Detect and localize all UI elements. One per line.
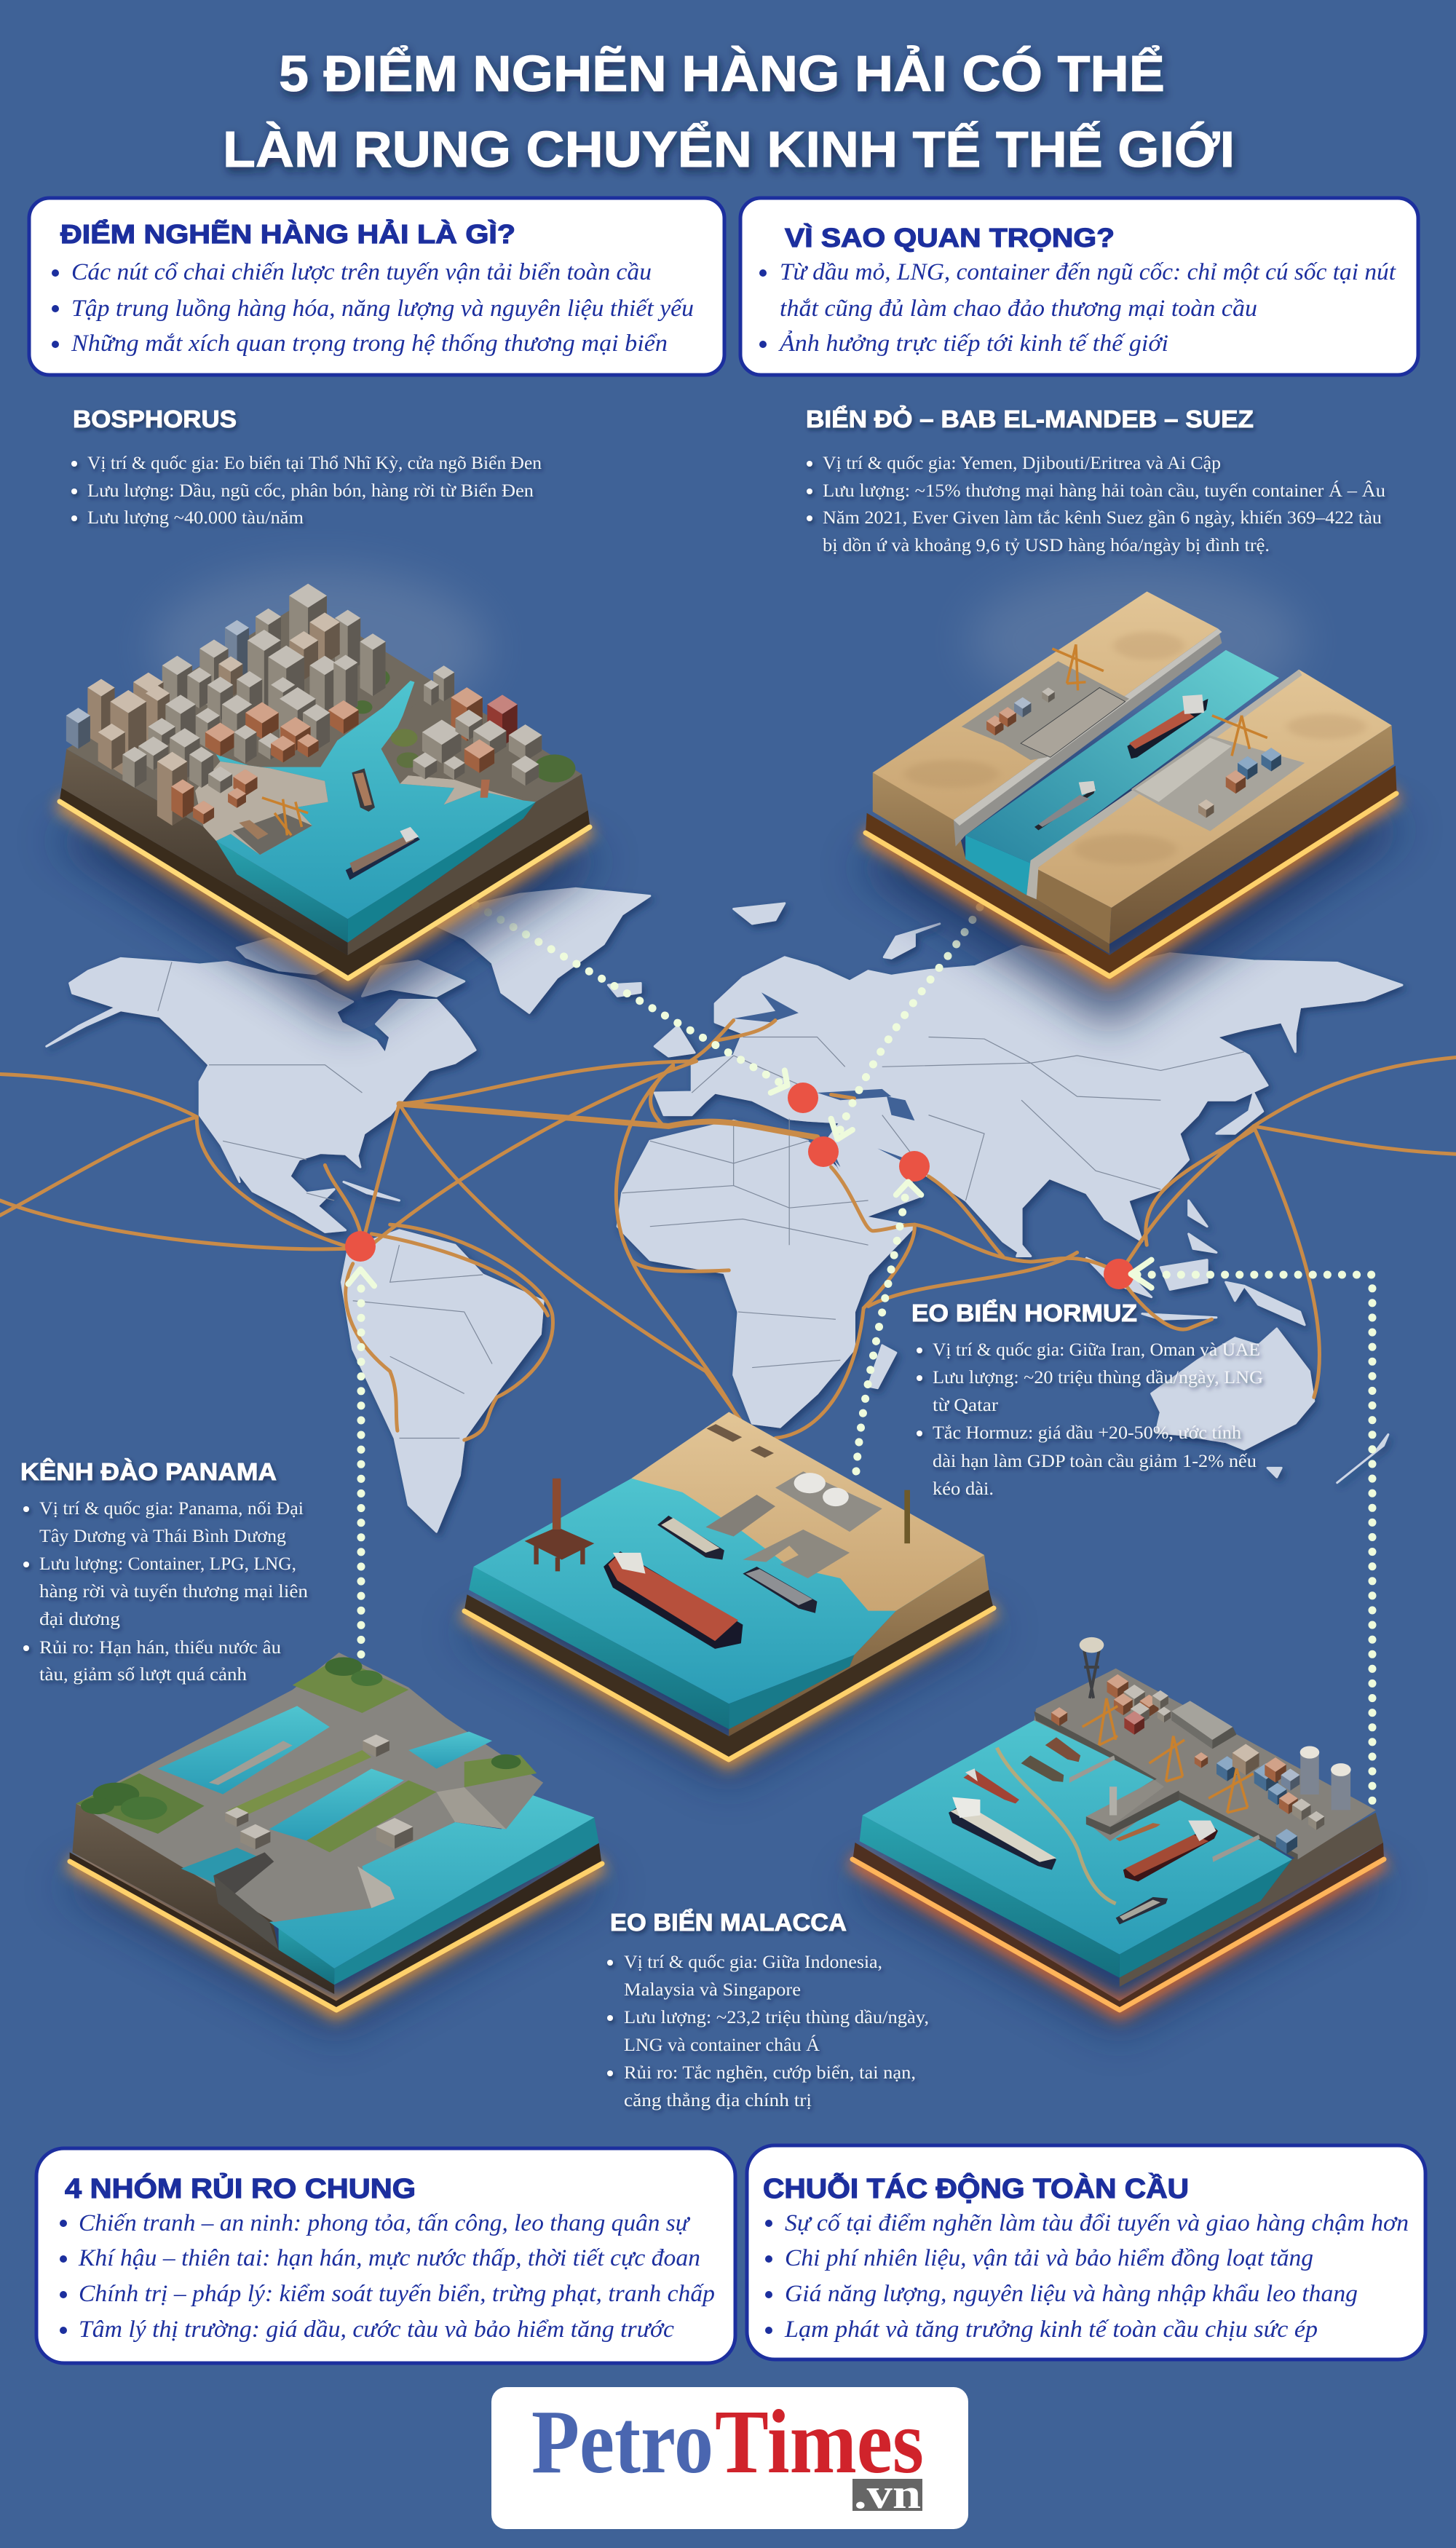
arrowheads: [348, 1070, 1152, 1288]
text block: Hormuz: kéo dài.: [933, 1479, 994, 1499]
logo: Times: [715, 2392, 924, 2493]
bullet list: Tập trung luồng hàng hóa, năng lượng và nguyên liệu thiết yếu: [71, 296, 694, 322]
shipping routes: [0, 1021, 1456, 1440]
text block: Hormuz: Lưu lượng: ~20 triệu thùng dầu/ngày, LNG: [933, 1368, 1263, 1388]
text block: Malacca: [607, 1909, 929, 2110]
bullet list: [765, 2210, 1409, 2343]
bullet list: Lạm phát và tăng trưởng kinh tế toàn cầu chịu sức ép: [784, 2316, 1318, 2343]
bullet list: Chính trị – pháp lý: kiểm soát tuyến biển, trừng phạt, tranh chấp: [79, 2281, 715, 2307]
platform shadows and halos: [51, 568, 1409, 2035]
text block: Hormuz: dài hạn làm GDP toàn cầu giảm 1-2% nếu: [933, 1452, 1257, 1471]
text block: Red Sea Suez: Năm 2021, Ever Given làm tắc kênh Suez gần 6 ngày, khiến 369–422 tàu: [823, 508, 1382, 528]
icon: Hormuz diorama: [464, 1412, 994, 1760]
text block: Red Sea Suez: BIỂN ĐỎ – BAB EL-MANDEB – SUEZ: [806, 405, 1254, 432]
text block: Bosphorus: Vị trí & quốc gia: Eo biển tại Thổ Nhĩ Kỳ, cửa ngõ Biển Đen: [87, 454, 542, 473]
heading: CHUỖI TÁC ĐỘNG TOÀN CẦU: [763, 2172, 1189, 2204]
text block: Red Sea Suez: Vị trí & quốc gia: Yemen, Djibouti/Eritrea và Ai Cập: [823, 454, 1221, 473]
text block: Panama: đại dương: [39, 1610, 121, 1629]
text block: Panama: [20, 1458, 309, 1685]
text block: Hormuz: [911, 1299, 1263, 1499]
panel: why it matters: [740, 198, 1418, 375]
text block: Panama: tàu, giảm số lượt quá cảnh: [39, 1665, 248, 1685]
text block: Hormuz: Vị trí & quốc gia: Giữa Iran, Oman và UAE: [933, 1340, 1260, 1360]
text block: Malacca: EO BIỂN MALACCA: [610, 1909, 847, 1936]
text block: Bosphorus: [71, 405, 542, 528]
bullet list: [60, 2210, 715, 2343]
text block: Hormuz: Tắc Hormuz: giá dầu +20-50%, ước tính: [933, 1423, 1242, 1443]
text block: Bosphorus: Lưu lượng ~40.000 tàu/năm: [87, 508, 304, 528]
text block: Bosphorus: BOSPHORUS: [73, 405, 237, 432]
title: LÀM RUNG CHUYỂN KINH TẾ THẾ GIỚI: [223, 120, 1235, 178]
logo: .vn: [854, 2470, 921, 2517]
text block: Red Sea Suez: [806, 405, 1386, 555]
panel: global impact chain: [747, 2145, 1425, 2359]
world map: [47, 888, 1402, 1532]
bullet list: Những mắt xích quan trọng trong hệ thống thương mại biển: [71, 331, 668, 357]
text block: Panama: hàng rời và tuyến thương mại liên: [39, 1582, 309, 1602]
title: [223, 44, 1235, 178]
text block: Red Sea Suez: bị dồn ứ và khoảng 9,6 tỷ USD hàng hóa/ngày bị đình trệ.: [823, 536, 1270, 555]
bullet list: Chiến tranh – an ninh: phong tỏa, tấn công, leo thang quân sự: [79, 2210, 691, 2236]
icon: Malacca diorama: [852, 1637, 1384, 2010]
panel: four risk groups: [36, 2148, 735, 2363]
bullet list: [759, 259, 1396, 357]
bullet list: Sự cố tại điểm nghẽn làm tàu đổi tuyến và giao hàng chậm hơn: [785, 2210, 1409, 2236]
icon: Suez canal diorama: [866, 592, 1397, 976]
text block: Malacca: Malaysia và Singapore: [624, 1980, 801, 2000]
text block: Malacca: Rủi ro: Tắc nghẽn, cướp biển, tai nạn,: [624, 2063, 916, 2083]
text block: Red Sea Suez: Lưu lượng: ~15% thương mại hàng hải toàn cầu, tuyến container Á – Âu: [823, 480, 1386, 501]
logo: Petro: [531, 2392, 713, 2493]
text block: Panama: KÊNH ĐÀO PANAMA: [20, 1458, 277, 1485]
panel: what is a chokepoint: [29, 198, 724, 375]
title: 5 ĐIỂM NGHẼN HÀNG HẢI CÓ THỂ: [279, 44, 1165, 102]
bullet list: Tâm lý thị trường: giá dầu, cước tàu và bảo hiểm tăng trước: [79, 2316, 674, 2343]
bullet list: Ảnh hưởng trực tiếp tới kinh tế thế giới: [778, 330, 1168, 357]
logo: [491, 2387, 968, 2529]
bullet list: Khí hậu – thiên tai: hạn hán, mực nước thấp, thời tiết cực đoan: [78, 2245, 700, 2271]
text block: Hormuz: EO BIỂN HORMUZ: [911, 1299, 1137, 1326]
heading: VÌ SAO QUAN TRỌNG?: [785, 223, 1115, 253]
bullet list: Từ dầu mỏ, LNG, container đến ngũ cốc: chỉ một cú sốc tại nút: [780, 259, 1396, 285]
text block: Panama: Tây Dương và Thái Bình Dương: [39, 1527, 287, 1546]
text block: Malacca: Vị trí & quốc gia: Giữa Indonesia,: [624, 1952, 882, 1972]
text block: Malacca: căng thẳng địa chính trị: [624, 2091, 812, 2110]
country borders: [158, 962, 1244, 1439]
icon: Bosphorus diorama: [60, 584, 590, 978]
text block: Panama: Vị trí & quốc gia: Panama, nối Đại: [39, 1499, 304, 1519]
bullet list: [52, 259, 694, 357]
text block: Panama: Lưu lượng: Container, LPG, LNG,: [39, 1554, 296, 1574]
icon: Panama diorama: [70, 1653, 602, 2010]
text block: Panama: Rủi ro: Hạn hán, thiếu nước âu: [39, 1638, 282, 1658]
text block: Bosphorus: Lưu lượng: Dầu, ngũ cốc, phân bón, hàng rời từ Biển Đen: [87, 481, 534, 501]
bullet list: Giá năng lượng, nguyên liệu và hàng nhập khẩu leo thang: [785, 2281, 1358, 2307]
text block: Hormuz: từ Qatar: [933, 1396, 999, 1415]
bullet list: thắt cũng đủ làm chao đảo thương mại toàn cầu: [780, 296, 1257, 322]
bullet list: Chi phí nhiên liệu, vận tải và bảo hiểm đồng loạt tăng: [785, 2245, 1313, 2271]
bullet list: Các nút cổ chai chiến lược trên tuyến vận tải biển toàn cầu: [71, 259, 652, 285]
heading: ĐIỂM NGHẼN HÀNG HẢI LÀ GÌ?: [60, 218, 515, 249]
text block: Malacca: Lưu lượng: ~23,2 triệu thùng dầu/ngày,: [624, 2008, 929, 2027]
location markers: [345, 1083, 1134, 1289]
dotted connectors: [361, 905, 1372, 1801]
text block: Malacca: LNG và container châu Á: [624, 2035, 820, 2055]
heading: 4 NHÓM RỦI RO CHUNG: [65, 2172, 416, 2204]
